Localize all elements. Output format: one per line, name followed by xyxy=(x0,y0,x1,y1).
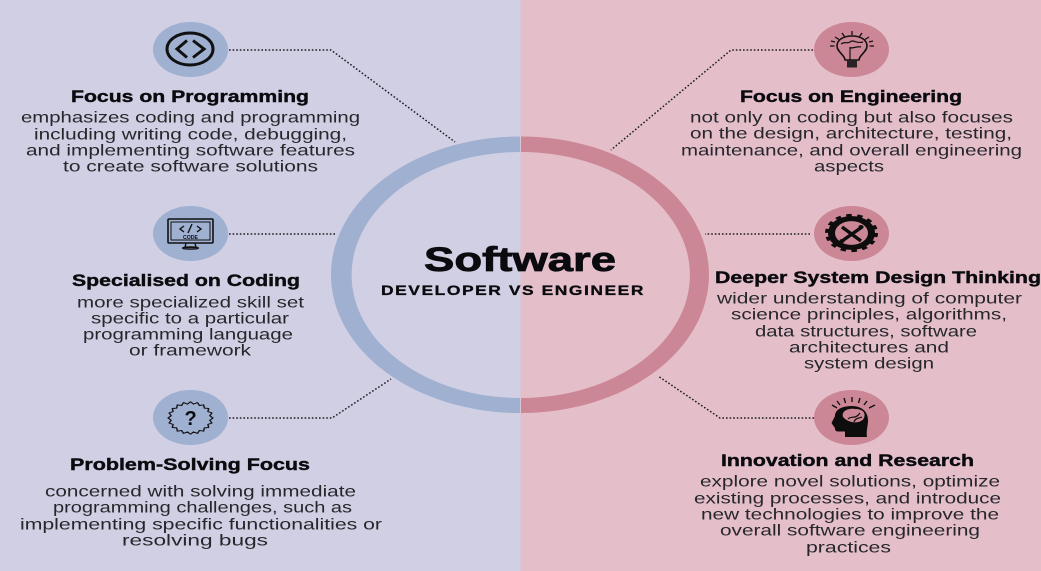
text: coding description: specific to a particular xyxy=(91,310,290,328)
text: problem-solving description: programming challenges, such as xyxy=(53,500,352,516)
text: coding description: programming language xyxy=(83,326,293,344)
dotted connector: system design xyxy=(705,233,810,235)
heading: focus on programming: Focus on Programming xyxy=(71,87,309,106)
subtitle: DEVELOPER VS ENGINEER xyxy=(381,283,645,298)
icon: gear with tools xyxy=(814,206,889,261)
text: engineering description: maintenance, and overall engineering xyxy=(681,142,1022,160)
text: engineering description: not only on coding but also focuses xyxy=(690,110,1013,126)
heading: deeper system design thinking: Deeper System Design Thinking xyxy=(715,268,1041,287)
panel: software engineer xyxy=(520,0,1041,571)
heading: problem-solving focus: Problem-Solving Focus xyxy=(70,455,310,474)
icon: code monitor: CODE xyxy=(183,235,199,241)
icon: brain light bulb xyxy=(814,22,889,77)
dotted connector: problem solving xyxy=(229,379,391,418)
icon: question badge: ? xyxy=(184,408,197,430)
text: innovation description: new technologies to improve the xyxy=(701,506,999,524)
panel: software developer xyxy=(0,0,520,571)
icon: code brackets xyxy=(153,22,228,77)
text: problem-solving description: implementing specific functionalities or xyxy=(20,516,383,534)
central ring xyxy=(331,136,709,413)
text: innovation description xyxy=(694,474,1001,556)
text: innovation description: overall software engineering xyxy=(720,522,980,540)
text: innovation description: existing processes, and introduce xyxy=(694,490,1001,508)
text: coding description: or framework xyxy=(129,342,252,360)
text: system design description: wider understanding of computer xyxy=(716,290,1023,308)
dotted connector: engineering xyxy=(611,50,813,150)
text: programming description: including writing code, debugging, xyxy=(34,126,347,144)
icon: question badge xyxy=(153,390,228,445)
text: problem-solving description xyxy=(20,484,383,550)
icon: head with brain xyxy=(814,390,889,445)
text: coding description xyxy=(77,294,305,360)
text: innovation description: explore novel solutions, optimize xyxy=(700,474,1000,490)
dotted connector: coding xyxy=(229,233,336,235)
heading: specialised on coding: Specialised on Coding xyxy=(72,271,300,290)
heading: innovation and research: Innovation and Research xyxy=(721,451,974,470)
text: engineering description: aspects xyxy=(814,158,884,176)
heading: focus on engineering: Focus on Engineering xyxy=(740,87,962,106)
text: system design description: data structures, software xyxy=(755,324,977,340)
text: innovation description: practices xyxy=(806,540,891,556)
text: system design description: system design xyxy=(804,356,934,372)
text: coding description: more specialized skill set xyxy=(77,294,305,312)
text: problem-solving description: resolving bugs xyxy=(122,532,268,550)
text: programming description: emphasizes coding and programming xyxy=(21,110,360,126)
title: Software xyxy=(424,241,616,279)
dotted connector: innovation xyxy=(658,376,814,418)
text: problem-solving description: concerned with solving immediate xyxy=(45,484,356,500)
text: programming description: and implementing software features xyxy=(26,142,355,160)
text: programming description xyxy=(21,110,360,176)
text: programming description: to create software solutions xyxy=(63,158,318,176)
icon: code monitor xyxy=(153,206,228,261)
text: engineering description: on the design, architecture, testing, xyxy=(690,126,1012,142)
text: system design description xyxy=(716,290,1023,372)
text: system design description: architectures and xyxy=(789,340,949,356)
text: engineering description xyxy=(681,110,1022,176)
text: system design description: science principles, algorithms, xyxy=(731,306,1007,324)
title xyxy=(381,241,645,298)
dotted connector: programming xyxy=(229,50,455,142)
